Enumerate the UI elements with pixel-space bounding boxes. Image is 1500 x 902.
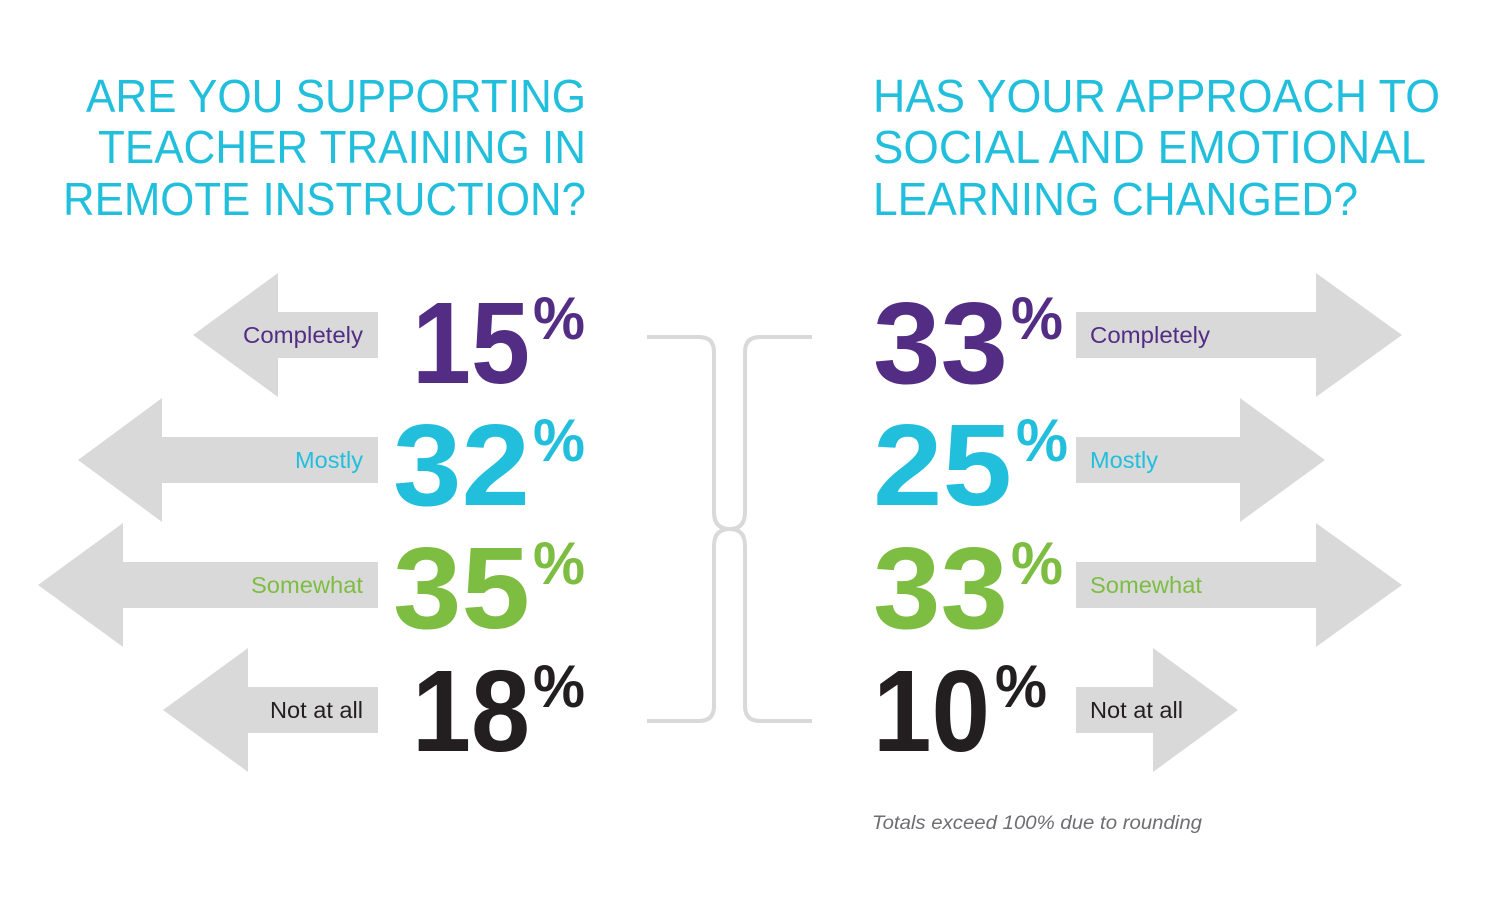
arrow: somewhat (1076, 523, 1402, 647)
arrow: not at all (163, 648, 378, 772)
arrow: mostly: Mostly (295, 447, 364, 473)
arrow: not at all (1076, 648, 1238, 772)
footnote: Totals exceed 100% due to rounding (872, 813, 1202, 834)
title: left question (63, 70, 586, 225)
stat 10%: 10 (873, 646, 990, 776)
arrow: completely (1076, 273, 1402, 397)
stat 25%: % (1016, 407, 1068, 474)
stat 33%: % (1011, 285, 1063, 352)
stat 33% (873, 278, 1063, 408)
title: left question: REMOTE INSTRUCTION? (63, 173, 586, 225)
title: right question: SOCIAL AND EMOTIONAL (873, 121, 1426, 173)
arrow: completely: Completely (1090, 322, 1211, 348)
title: left question: TEACHER TRAINING IN (98, 121, 586, 173)
stat 18%: % (533, 653, 585, 720)
title: right question: HAS YOUR APPROACH TO (873, 70, 1440, 122)
arrow: completely (193, 273, 378, 397)
right percentages (873, 278, 1068, 776)
arrow: mostly (78, 398, 378, 522)
stat 15%: % (533, 285, 585, 352)
stat 18%: 18 (412, 646, 530, 776)
stat 25% (873, 400, 1068, 530)
stat 32%: 32 (393, 400, 530, 530)
stat 35% (393, 523, 585, 653)
title: left question: ARE YOU SUPPORTING (86, 70, 586, 122)
stat 10%: % (995, 653, 1047, 720)
arrow: completely: Completely (243, 322, 364, 348)
arrow: somewhat: Somewhat (1090, 572, 1203, 598)
stat 35%: 35 (393, 523, 530, 653)
stat 15%: 15 (412, 278, 530, 408)
left percentages (393, 278, 585, 776)
title: right question (873, 70, 1440, 225)
stat 32% (393, 400, 585, 530)
right arrows chart (1076, 273, 1402, 772)
left arrows chart (38, 273, 378, 772)
stat 33%: 33 (873, 278, 1008, 408)
stat 33% (873, 523, 1063, 653)
brackets (647, 337, 812, 721)
stat 33%: 33 (873, 523, 1008, 653)
arrow: not at all: Not at all (270, 697, 363, 723)
title: right question: LEARNING CHANGED? (873, 173, 1358, 225)
stat 25%: 25 (873, 400, 1012, 530)
stat 35%: % (533, 530, 585, 597)
stat 32%: % (533, 407, 585, 474)
arrow: not at all: Not at all (1090, 697, 1183, 723)
arrow: mostly: Mostly (1090, 447, 1159, 473)
arrow: somewhat (38, 523, 378, 647)
arrow: somewhat: Somewhat (251, 572, 364, 598)
stat 33%: % (1011, 530, 1063, 597)
arrow: mostly (1076, 398, 1325, 522)
